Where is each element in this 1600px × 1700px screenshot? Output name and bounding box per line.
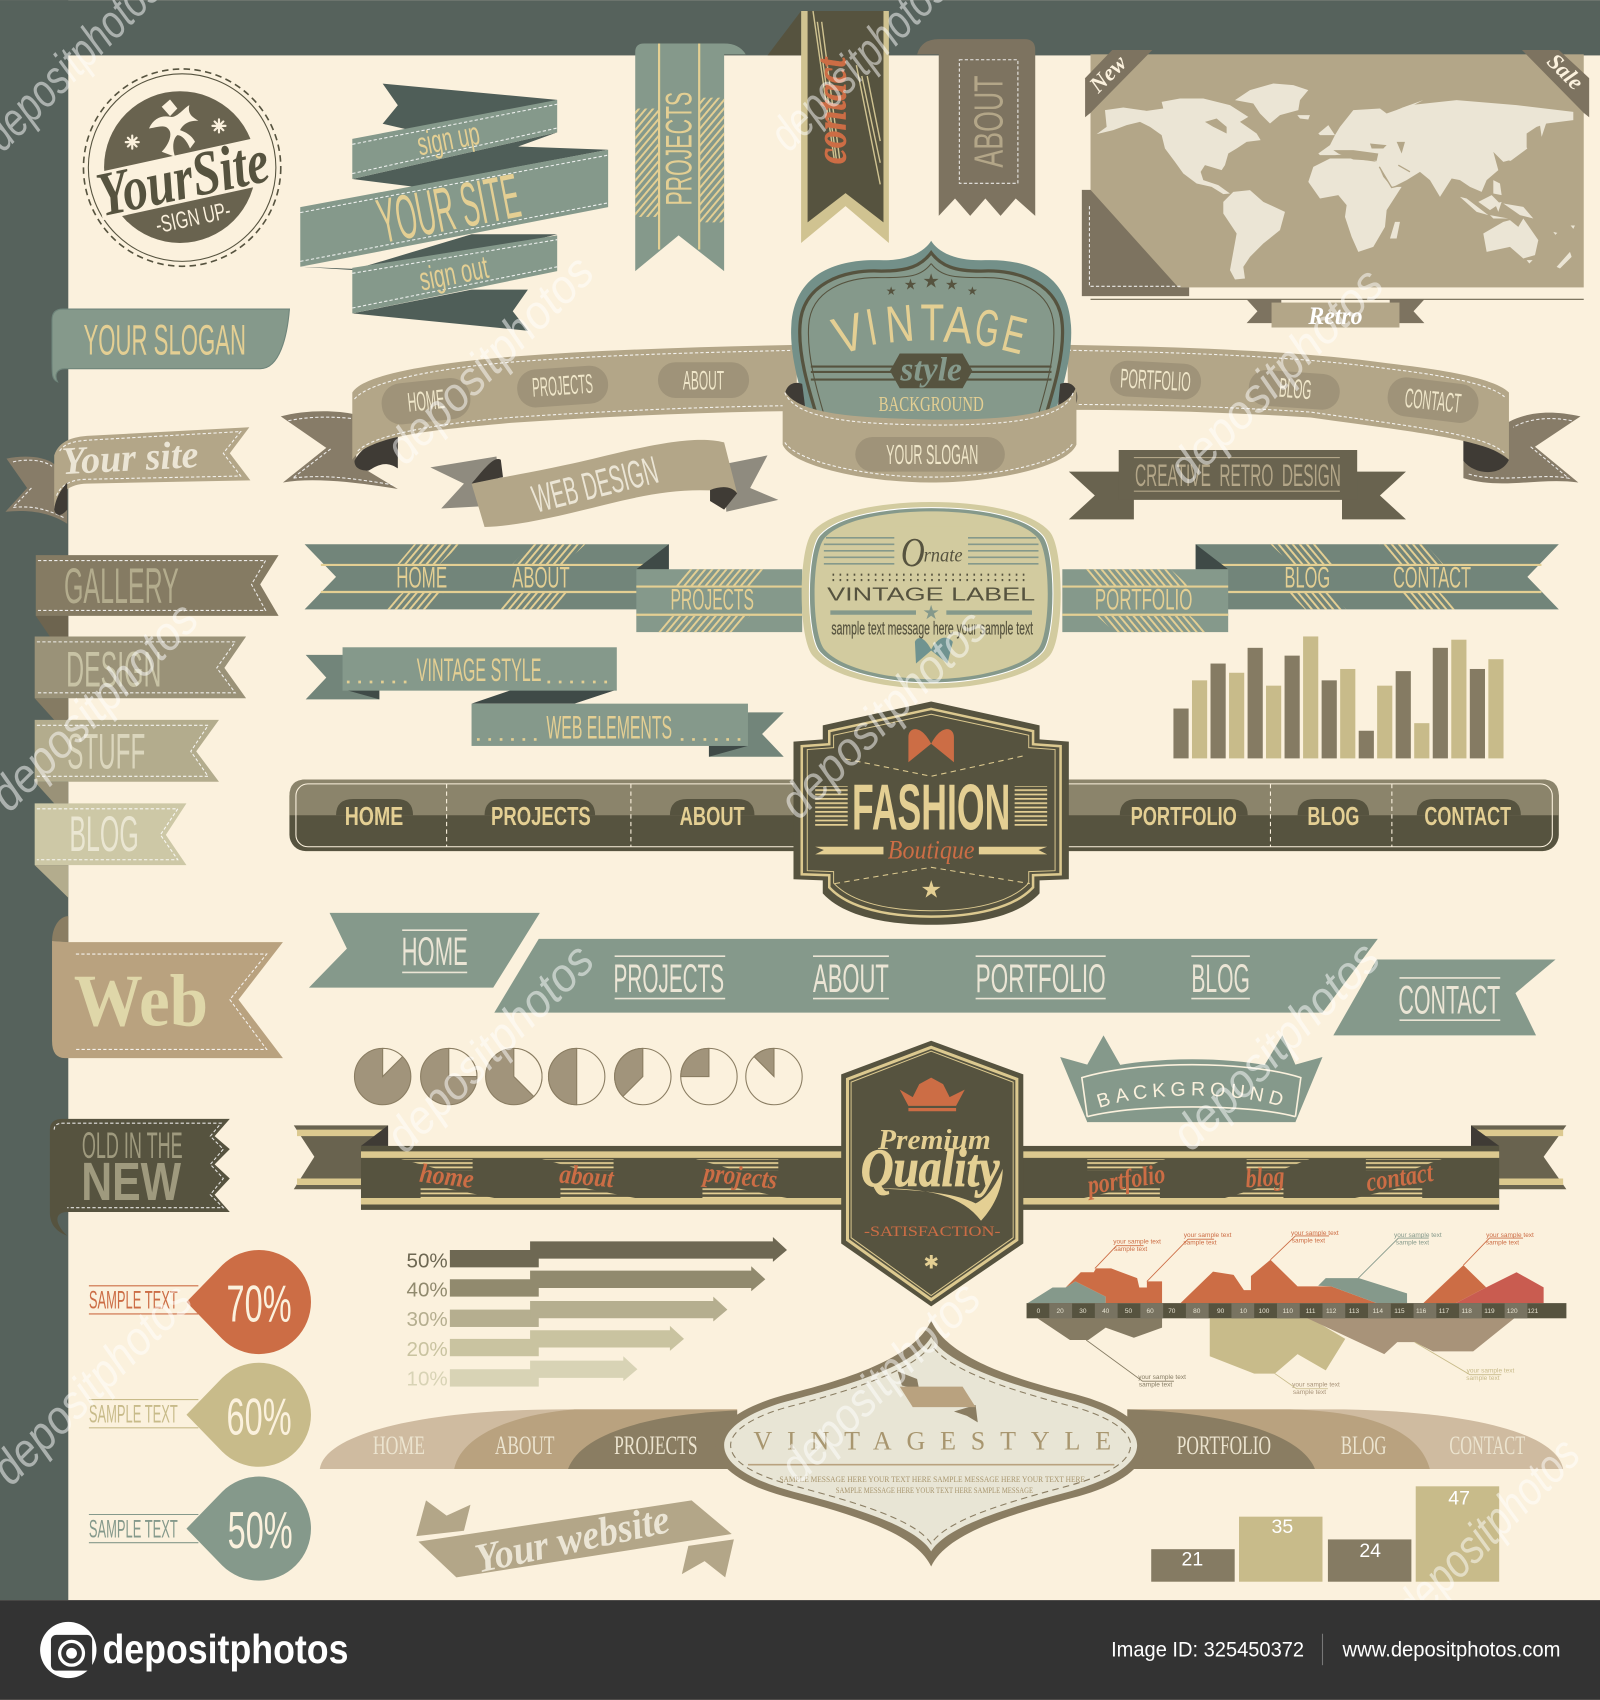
stars [886, 270, 978, 298]
callout lines and labels: your sample text [1113, 1238, 1161, 1245]
axis labels: 110 [1283, 1308, 1293, 1315]
shield badge: VINTAGE style [783, 241, 1077, 483]
callout lines and labels: sample text [1396, 1240, 1429, 1247]
ribbon tail right [1463, 413, 1580, 483]
stars: ★ [945, 277, 959, 294]
world map continents [1097, 83, 1575, 279]
text: Ornate: O [901, 529, 925, 575]
ribbon: Retro [1247, 299, 1424, 330]
tab: Web: Web [74, 960, 208, 1042]
nav labels: CONTACT [1393, 563, 1471, 595]
axis labels: 20 [1057, 1308, 1064, 1315]
world map panel [1082, 48, 1589, 330]
nav pills left [380, 362, 749, 426]
ribbon: HOME: HOME [402, 930, 468, 974]
watermarks: depositphotos [375, 245, 604, 475]
tail left [294, 1125, 388, 1189]
area chart with axis [1027, 1230, 1566, 1396]
label: style: style [899, 352, 962, 389]
arrow bar chart [407, 1237, 787, 1391]
callout lines and labels: your sample text [1292, 1382, 1340, 1389]
row 30%: 30% [407, 1308, 448, 1331]
badge: FASHION Boutique [793, 701, 1069, 925]
wrap band: YOUR SLOGAN: YOUR SLOGAN [886, 438, 978, 470]
ribbon stack: sign up / your site / sign out [300, 84, 608, 331]
icon: bow [915, 638, 953, 664]
ribbon: main nav [494, 939, 1378, 1013]
callout lines and labels: your sample text [1486, 1232, 1534, 1239]
row 10%: 10% [407, 1368, 448, 1391]
tab: DESIGN [35, 636, 246, 720]
tab: DESIGN: DESIGN [66, 641, 162, 697]
axis labels: 111 [1306, 1308, 1316, 1315]
corner: dark fold [1082, 190, 1189, 296]
nav labels: home [418, 1158, 476, 1194]
text: ABOUT: ABOUT [966, 75, 1012, 168]
ribbon: Retro: Retro [1307, 303, 1363, 330]
stars: ★ [967, 284, 978, 298]
drop: 60%: SAMPLE TEXT [89, 1400, 178, 1428]
callout lines and labels: your sample text [1394, 1232, 1442, 1239]
text: brand: depositphotos [102, 1626, 349, 1672]
nav labels: PORTFOLIO [1131, 801, 1237, 831]
ribbon: BACKGROUND arc: BACKGROUND [1096, 1082, 1282, 1108]
logo text: YourSite: YourSite [91, 125, 275, 230]
column chart: 47 [1448, 1488, 1470, 1510]
text: SATISFACTION: -SATISFACTION- [864, 1223, 1001, 1240]
tab: GALLERY: GALLERY [64, 558, 179, 614]
badge: Premium Quality [841, 1041, 1023, 1306]
tab: YOUR SLOGAN: YOUR SLOGAN [83, 317, 246, 364]
nav labels: ABOUT [680, 801, 745, 831]
small caption [779, 1475, 1085, 1495]
nav labels: HOME [345, 801, 403, 831]
corner ribbon: New: New [1083, 50, 1132, 98]
bookmark: ABOUT [917, 39, 1035, 216]
striped nav: left [305, 544, 802, 632]
text: VINTAGE: N [883, 294, 916, 355]
stat drops [89, 1250, 311, 1581]
row 30% [407, 1297, 727, 1331]
nav pills left: HOME [406, 383, 446, 418]
drop: 50%: SAMPLE TEXT [89, 1515, 178, 1543]
column chart [1151, 1486, 1499, 1582]
drop: 70%: SAMPLE TEXT [89, 1287, 178, 1315]
axis labels: 80 [1193, 1308, 1201, 1315]
text: PROJECTS: PROJECTS [659, 92, 700, 206]
nav labels: CONTACT [1424, 801, 1511, 831]
icon: crown [900, 1078, 965, 1111]
column chart: 21 [1182, 1548, 1203, 1570]
drop: 50%: 50% [228, 1502, 293, 1560]
row 10% [407, 1356, 637, 1391]
nav labels [396, 563, 754, 616]
nav labels: BLOG [1285, 563, 1330, 595]
nav pills [336, 799, 1521, 815]
ribbon: WEB DESIGN: WEB DESIGN [528, 449, 663, 522]
ribbon: WEB ELEMENTS [472, 704, 784, 757]
column chart: 24 [1359, 1540, 1381, 1562]
axis labels: 70 [1168, 1308, 1176, 1315]
callout lines and labels [1086, 1230, 1534, 1396]
stars: ★ [904, 277, 917, 294]
corner ribbon: New [1083, 50, 1152, 117]
text: VINTAGE: A [942, 296, 974, 356]
striped nav: dark with orange labels [294, 1125, 1566, 1210]
ribbon: main nav: BLOG [1191, 957, 1250, 1001]
row 50%: 50% [407, 1249, 448, 1272]
axis labels: 0 [1037, 1308, 1041, 1315]
nav labels: portfolio [1084, 1158, 1167, 1200]
watermarks: depositphotos [1161, 932, 1390, 1161]
axis labels [1037, 1308, 1539, 1315]
ribbon: Your site: Your site [61, 433, 199, 483]
small caption: SAMPLE MESSAGE HERE YOUR TEXT HERE SAMPLE MESSAGE HERE YOUR TEXT HERE [779, 1475, 1085, 1484]
axis labels: 60 [1147, 1308, 1154, 1315]
ribbon tail left [281, 411, 398, 489]
tab: GALLERY [36, 555, 279, 640]
ribbon: main nav: ABOUT [813, 957, 889, 1001]
axis labels: 100 [1259, 1308, 1270, 1315]
text: VINTAGESTYLE: VINTAGESTYLE [753, 1426, 1111, 1455]
banner: CREATIVE RETRO DESIGN: CREATIVE RETRO DESIGN [1135, 458, 1341, 493]
main curved ribbon with navigation [281, 345, 1580, 489]
axis labels: 121 [1527, 1308, 1539, 1315]
row 40% [407, 1266, 765, 1302]
bottom nav tabs [320, 1409, 1563, 1469]
footer bar [0, 1600, 1600, 1700]
axis labels: 30 [1079, 1308, 1087, 1315]
pie charts row [354, 1048, 802, 1105]
callout lines and labels: sample text [1139, 1382, 1172, 1389]
ornate label: VINTAGESTYLE [715, 1320, 1146, 1567]
row 20% [407, 1326, 684, 1361]
nav labels: about [558, 1159, 616, 1193]
ribbon: main nav: PROJECTS [614, 957, 724, 1001]
tab: BLOG: BLOG [69, 806, 139, 862]
callout lines and labels: sample text [1114, 1246, 1147, 1253]
row 40%: 40% [407, 1279, 448, 1302]
label: Ornate vintage label [802, 502, 1061, 688]
bookmark: contact [767, 11, 889, 243]
tab labels: CONTACT [1449, 1431, 1525, 1460]
drop: 50% [89, 1477, 311, 1581]
axis labels: 119 [1484, 1308, 1495, 1315]
callout lines and labels: your sample text [1467, 1367, 1515, 1374]
drop: 60%: 60% [227, 1388, 292, 1446]
text: Boutique: Boutique [888, 836, 975, 865]
axis labels: 118 [1461, 1308, 1472, 1315]
watermarks: depositphotos [1157, 258, 1394, 495]
axis labels: 120 [1507, 1308, 1518, 1315]
nav pills left: ABOUT [683, 364, 724, 395]
tab labels: ABOUT [495, 1431, 555, 1460]
logo text: sign up: -SIGN UP- [153, 197, 233, 239]
icon: star: ✱ [923, 1251, 939, 1272]
band right [1068, 345, 1509, 460]
text: sample message: sample text message here your sample text [831, 617, 1033, 638]
icon: star: ★ [922, 602, 940, 624]
tab: STUFF: STUFF [67, 724, 145, 780]
drop: 70%: 70% [227, 1276, 292, 1334]
wrap band: YOUR SLOGAN [783, 386, 1076, 483]
banner: CREATIVE RETRO DESIGN [1069, 450, 1406, 519]
nav pills right: CONTACT [1403, 382, 1463, 419]
row 20%: 20% [407, 1338, 448, 1361]
tab labels: PROJECTS [614, 1431, 698, 1460]
axis labels: 112 [1326, 1308, 1337, 1315]
axis labels: 114 [1373, 1308, 1383, 1315]
navigation bar: dark pill [289, 780, 1559, 851]
drop: 70% [89, 1250, 311, 1354]
icon: camera logo [40, 1622, 96, 1678]
striped nav: right [1062, 544, 1559, 632]
watermarks: depositphotos [375, 934, 604, 1163]
callout lines and labels: sample text [1292, 1237, 1325, 1244]
ribbon: WEB DESIGN [430, 440, 778, 527]
tab: OLD IN THE NEW: OLD IN THE [82, 1125, 183, 1166]
small caption: SAMPLE MESSAGE HERE YOUR TEXT HERE SAMPLE MESSAGE [836, 1486, 1033, 1495]
row 50% [407, 1237, 787, 1272]
text: sign up: sign up [414, 115, 483, 162]
tab: BLOG [35, 803, 186, 898]
nav labels: blog [1244, 1161, 1285, 1193]
stars: ★ [922, 270, 940, 292]
bar chart [1173, 636, 1504, 758]
teal nav ribbons [309, 913, 1556, 1035]
ribbon: CONTACT [1333, 959, 1556, 1035]
ribbon: WEB ELEMENTS: WEB ELEMENTS [546, 709, 672, 745]
nav labels: BLOG [1307, 801, 1359, 831]
ribbon: VINTAGE STYLE: VINTAGE STYLE [417, 652, 541, 688]
tab labels: HOME [373, 1431, 425, 1460]
icon: stars [126, 119, 225, 149]
nav labels: PROJECTS [491, 801, 591, 831]
mini ribbon [898, 1371, 978, 1422]
nav labels [345, 801, 1511, 831]
ribbon: Your site [5, 427, 250, 524]
nav labels: ABOUT [512, 563, 570, 595]
tab: OLD IN THE NEW [50, 1119, 230, 1236]
tab: STUFF [35, 720, 219, 803]
text: Quality: Quality [861, 1138, 1000, 1198]
text: Ornate [901, 529, 963, 575]
ribbon: BACKGROUND arc [1060, 1036, 1322, 1122]
callout lines and labels: sample text [1486, 1240, 1519, 1247]
ribbon: Your website: Your website [471, 1495, 673, 1581]
nav labels: projects [701, 1157, 779, 1195]
axis labels: 50 [1125, 1308, 1132, 1315]
logo badge: Your Site [83, 69, 281, 266]
tab labels: PORTFOLIO [1177, 1431, 1271, 1460]
tab labels: BLOG [1341, 1431, 1386, 1460]
axis labels: 117 [1439, 1308, 1449, 1315]
tab: Web [52, 916, 283, 1058]
tab: YOUR SLOGAN [52, 309, 289, 382]
text: Ornate: rnate [924, 546, 963, 567]
nav labels: contact [1364, 1157, 1436, 1197]
axis labels: 115 [1394, 1308, 1405, 1315]
bookmark: PROJECTS [635, 43, 746, 271]
band left [352, 345, 797, 460]
text: image id: Image ID: 325450372 [1111, 1637, 1304, 1662]
text: contact: contact [808, 56, 856, 164]
column chart: 35 [1272, 1516, 1293, 1538]
text: Vintage Label: VINTAGE LABEL [827, 584, 1035, 605]
stars: ★ [886, 284, 896, 298]
callout lines and labels: your sample text [1138, 1374, 1186, 1381]
axis labels: 90 [1217, 1308, 1225, 1315]
nav pills left: PROJECTS [531, 368, 594, 403]
swoosh [873, 1169, 1003, 1221]
text: VINTAGE: V [827, 302, 871, 366]
ribbon: CONTACT: CONTACT [1398, 979, 1500, 1023]
text: BACKGROUND: BACKGROUND [879, 394, 984, 416]
tab labels [373, 1431, 1525, 1460]
text: VINTAGE: E [997, 305, 1032, 366]
nav pills right: PORTFOLIO [1120, 362, 1192, 397]
corner ribbon: Sale [1522, 48, 1589, 117]
callout lines and labels: your sample text [1291, 1230, 1339, 1237]
watermarks: depositphotos [769, 600, 998, 829]
text: sign out: sign out [416, 249, 491, 297]
nav labels: PORTFOLIO [1095, 584, 1192, 616]
axis labels: 40 [1102, 1308, 1110, 1315]
watermarks: depositphotos [769, 1271, 991, 1493]
text: VINTAGE: T [920, 295, 944, 353]
axis labels: 10 [1240, 1308, 1247, 1315]
stripes [401, 1159, 1442, 1198]
callout lines and labels: sample text [1293, 1389, 1326, 1396]
icon: fleur ornament [149, 99, 198, 157]
text: VINTAGE [827, 294, 1032, 366]
text: VINTAGE: G [971, 298, 1004, 359]
text: VINTAGE: I [862, 298, 881, 357]
text: website: www.depositphotos.com [1342, 1637, 1560, 1662]
nav labels: PROJECTS [670, 584, 754, 616]
nav labels [1095, 563, 1471, 616]
text: Premium: Premium [877, 1125, 991, 1156]
drop: 60% [89, 1363, 311, 1467]
ribbon: VINTAGE STYLE [306, 647, 617, 704]
nav labels [418, 1157, 1436, 1200]
ribbon: main nav: PORTFOLIO [976, 957, 1106, 1001]
axis labels: 116 [1416, 1308, 1427, 1315]
text: FASHION: FASHION [852, 770, 1010, 843]
ribbon: Your website [416, 1495, 734, 1581]
callout lines and labels: sample text [1466, 1375, 1500, 1382]
tail right [1471, 1125, 1566, 1189]
side tabs: gallery, design, stuff, blog [35, 555, 279, 898]
ribbon stack: sign up / your site / sign out: YOUR SITE [372, 161, 526, 257]
callout lines and labels: your sample text [1184, 1232, 1232, 1239]
nav pills right: BLOG [1278, 372, 1313, 405]
ribbon: HOME [309, 913, 540, 988]
nav pills right [1109, 360, 1481, 425]
tab: OLD IN THE NEW: NEW [81, 1152, 182, 1212]
corner ribbon: Sale: Sale [1542, 48, 1589, 95]
nav labels: HOME [396, 563, 447, 595]
callout lines and labels: sample text [1183, 1240, 1217, 1247]
axis labels: 113 [1349, 1308, 1359, 1315]
icon: bow [908, 729, 954, 762]
icon: star: ★ [920, 877, 942, 904]
